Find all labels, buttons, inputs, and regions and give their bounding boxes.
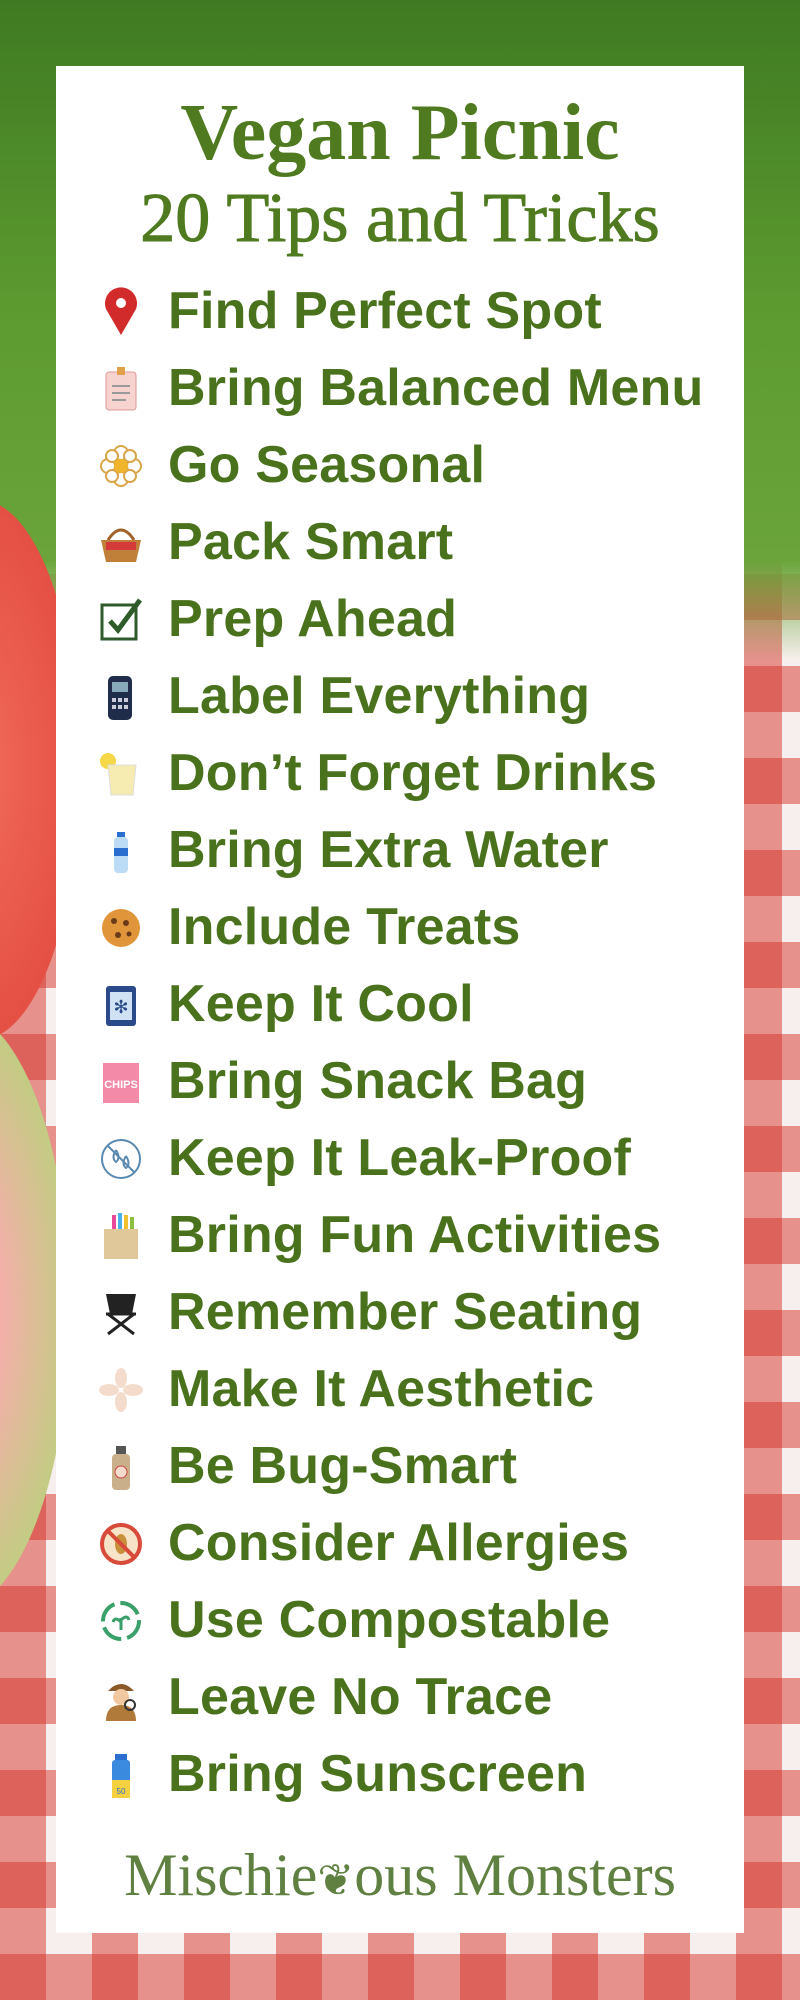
tip 8: Bring Extra Water: [168, 821, 609, 879]
tip 14: Remember Seating: [168, 1283, 642, 1341]
tip 20: Bring Sunscreen: [168, 1745, 587, 1803]
list of tips: [99, 282, 703, 1803]
tip 10: ✻: [113, 997, 129, 1017]
tip 12: Keep It Leak-Proof: [168, 1129, 631, 1187]
tip 18: Use Compostable: [168, 1591, 610, 1649]
tip 11: CHIPS: [104, 1079, 138, 1091]
tip 16: Be Bug-Smart: [168, 1437, 517, 1495]
tip 19: Leave No Trace: [168, 1668, 552, 1726]
tip 10: Keep It Cool: [168, 975, 474, 1033]
tip 13: Bring Fun Activities: [168, 1206, 661, 1264]
tip 4: Pack Smart: [168, 513, 453, 571]
tip 7: Don’t Forget Drinks: [168, 744, 657, 802]
tip 2: Bring Balanced Menu: [168, 359, 703, 417]
title: Vegan Picnic: [180, 89, 620, 177]
subtitle: 20 Tips and Tricks: [140, 180, 660, 257]
tip 20: 50: [117, 1787, 126, 1796]
tip 1: Find Perfect Spot: [168, 282, 602, 340]
tip 6: Label Everything: [168, 667, 590, 725]
tip 9: Include Treats: [168, 898, 520, 956]
tip 15: Make It Aesthetic: [168, 1360, 594, 1418]
tip 11: Bring Snack Bag: [168, 1052, 587, 1110]
tip 5: Prep Ahead: [168, 590, 457, 648]
footer brand: Mischie❦ous Monsters: [124, 1842, 676, 1908]
tip 3: Go Seasonal: [168, 436, 485, 494]
tip 17: Consider Allergies: [168, 1514, 629, 1572]
